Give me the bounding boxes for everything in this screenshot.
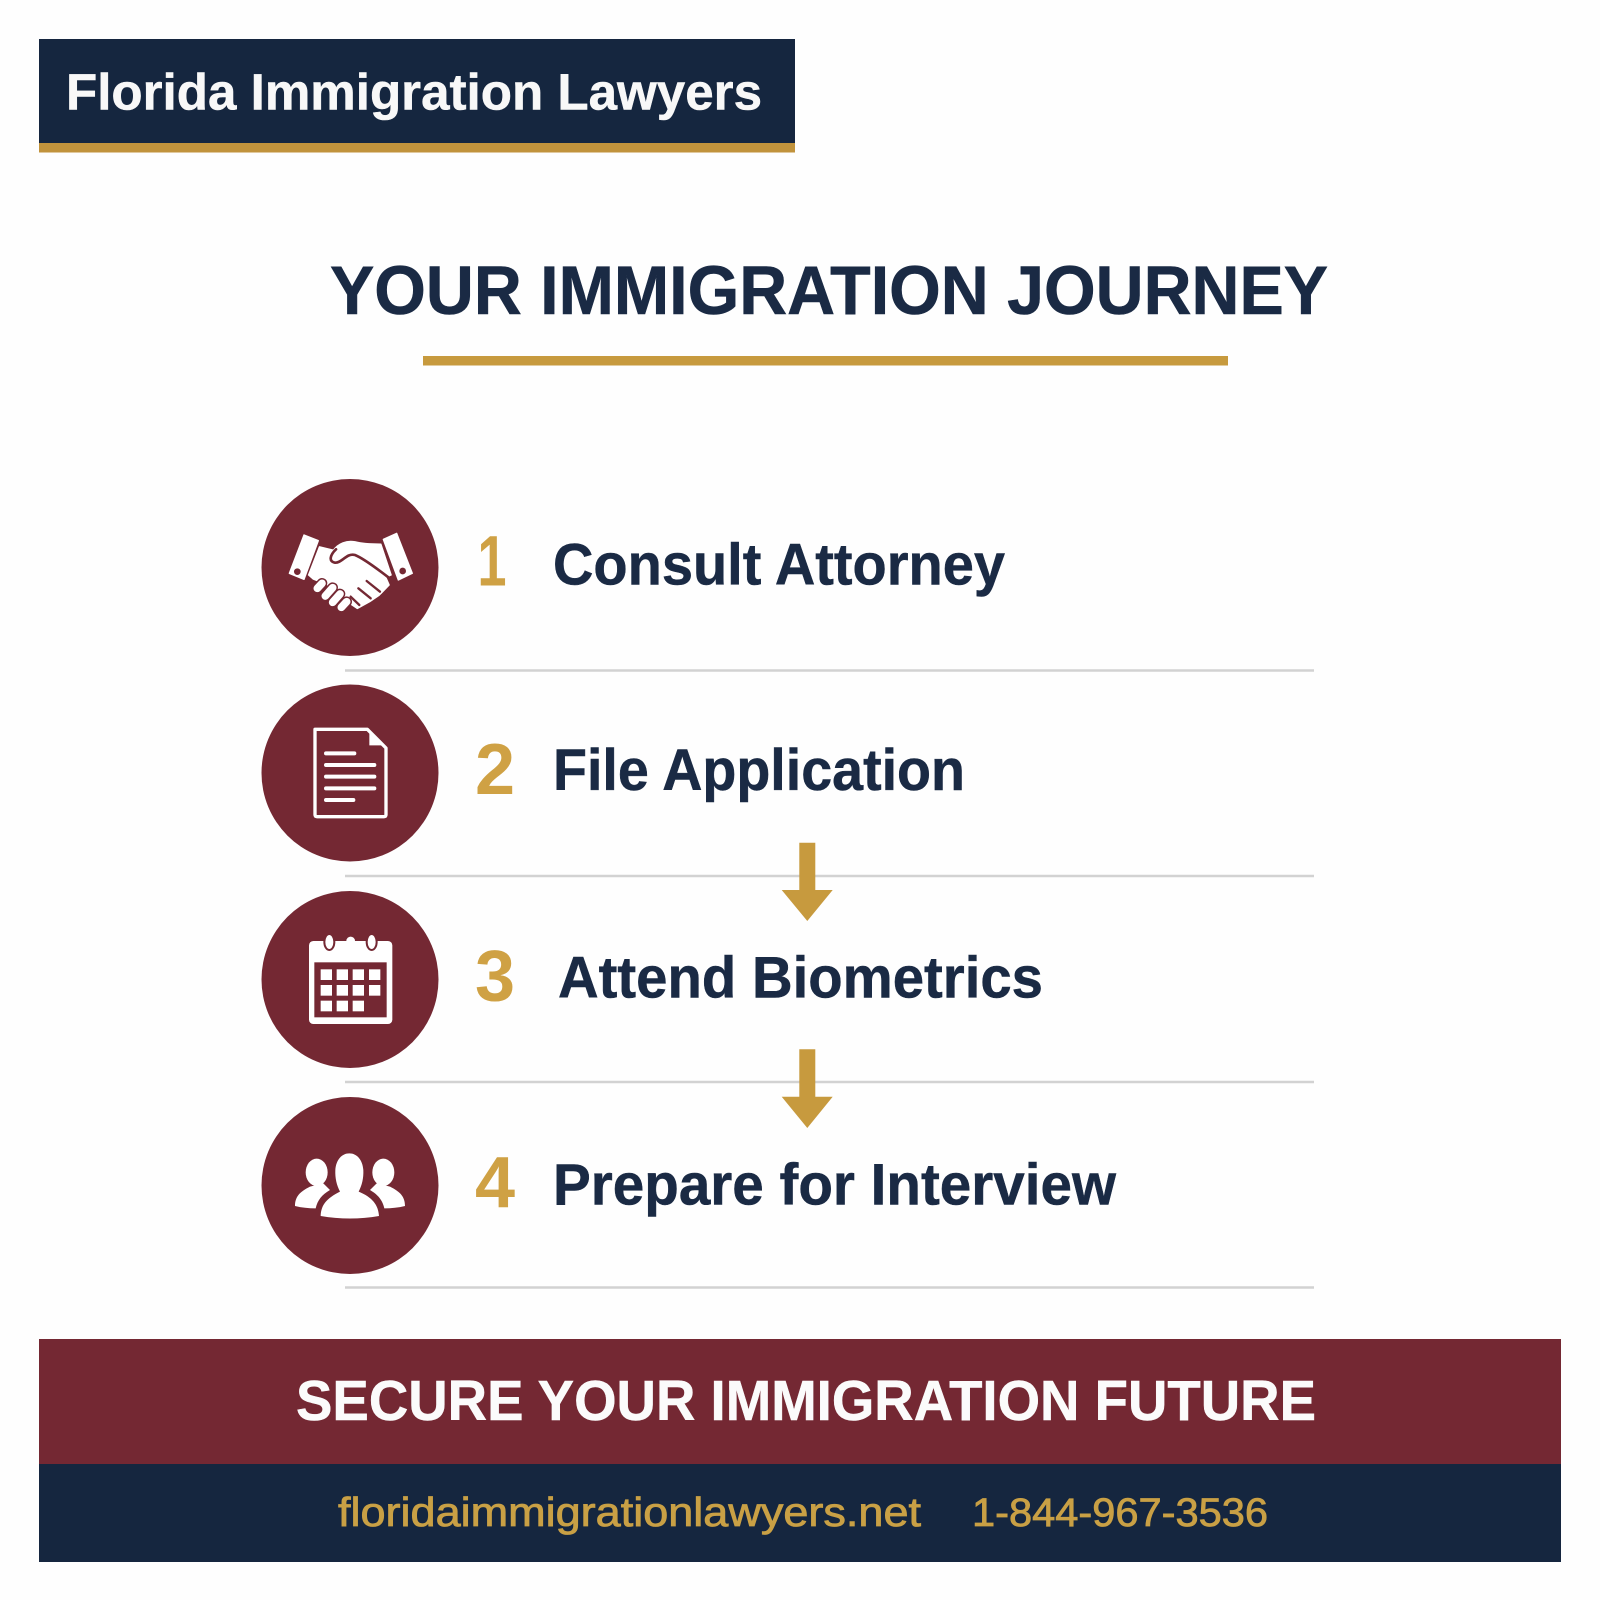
panel: step 4 prepare for interview	[262, 1097, 1117, 1274]
title	[330, 252, 1328, 366]
header brand name: Florida Immigration Lawyers	[66, 64, 762, 120]
panel: step 3 attend biometrics	[262, 891, 1043, 1068]
call to action text: SECURE YOUR IMMIGRATION FUTURE	[296, 1369, 1316, 1433]
title: YOUR IMMIGRATION JOURNEY	[330, 252, 1328, 329]
step number 3: 3	[475, 936, 515, 1016]
website url: floridaimmigrationlawyers.net	[338, 1489, 922, 1535]
step label: file application: File Application	[553, 738, 965, 803]
icon: group of people in maroon circle	[262, 1097, 438, 1274]
icon: handshake in maroon circle	[262, 479, 438, 656]
step number 4: 4	[475, 1143, 515, 1223]
step number 2: 2	[475, 730, 515, 810]
step label: prepare for interview: Prepare for Interview	[553, 1152, 1117, 1218]
panel: step 1 consult attorney	[262, 479, 1005, 656]
icon: document in maroon circle	[262, 684, 438, 862]
icon: calendar in maroon circle	[262, 891, 438, 1068]
step label: attend biometrics: Attend Biometrics	[558, 946, 1043, 1010]
arrow: step 2 to step 3	[782, 843, 833, 921]
contact footer	[39, 1464, 1561, 1562]
step number 1: 1	[478, 522, 506, 602]
phone number: 1-844-967-3536	[972, 1491, 1268, 1535]
arrow: step 3 to step 4	[782, 1049, 833, 1128]
step label: consult attorney: Consult Attorney	[553, 532, 1005, 598]
panel: step 2 file application	[262, 684, 965, 862]
header banner	[39, 39, 795, 152]
title underline	[423, 356, 1228, 366]
call to action banner	[39, 1339, 1561, 1464]
